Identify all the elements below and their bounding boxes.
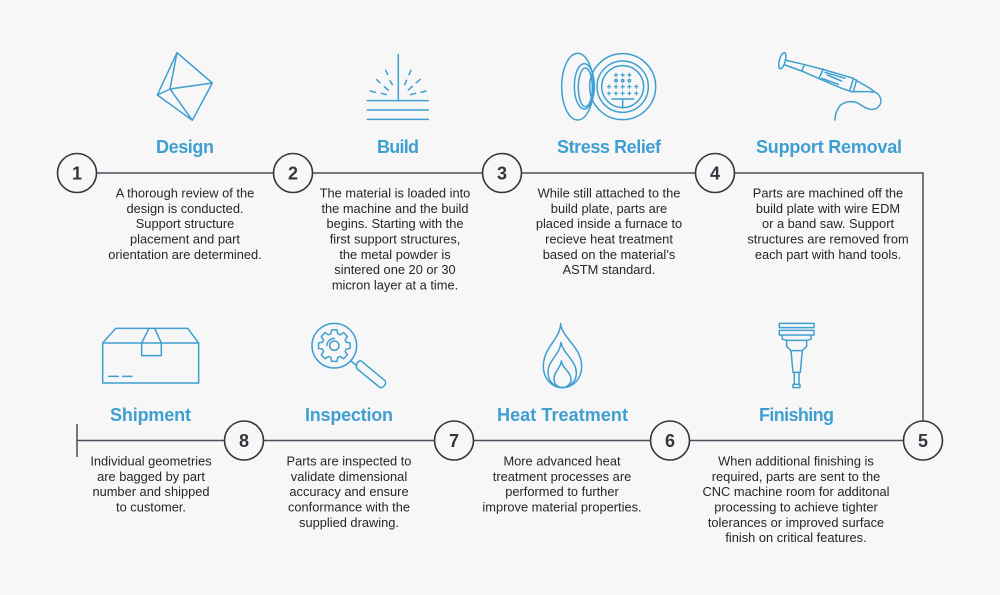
text: finishing description: finish on critical features. (725, 530, 867, 545)
number badge 7: 7 (449, 431, 459, 451)
text: stress relief description: While still attached to the (538, 186, 680, 200)
text: stress relief description: recieve heat treatment (545, 232, 673, 246)
text: support removal description: each part with hand tools. (755, 247, 901, 262)
step 6: heat treatment (482, 324, 642, 514)
text: finishing description: tolerances or improved surface (708, 515, 884, 530)
text: build description: The material is loaded into (320, 186, 470, 200)
step 4: support removal (747, 52, 909, 262)
text: finishing description: processing to achieve tighter (714, 500, 878, 514)
heading: heat treatment: Heat Treatment (497, 405, 628, 425)
step 1: design (108, 53, 262, 262)
text: finishing description (702, 454, 890, 545)
text: stress relief description (536, 186, 682, 277)
text: shipment description: to customer. (116, 500, 186, 514)
step 8: shipment (90, 328, 212, 514)
icon: flame (543, 324, 582, 388)
number badge 7 (434, 421, 474, 460)
text: design description: orientation are determined. (108, 247, 262, 262)
number badge 8 (224, 421, 264, 460)
text: shipment description (90, 454, 212, 514)
number badge 2: 2 (288, 164, 298, 184)
text: build description: the metal powder is (339, 247, 451, 262)
text: build description: micron layer at a time. (332, 278, 458, 292)
text: shipment description: are bagged by part (97, 469, 205, 484)
text: heat treatment description: improve material properties. (482, 500, 642, 514)
text: build description: the machine and the build (321, 201, 469, 216)
text: support removal description: or a band saw. Support (762, 216, 894, 231)
number badge 3 (482, 154, 522, 192)
text: heat treatment description: performed to further (505, 484, 619, 499)
text: inspection description: accuracy and ensure (289, 484, 409, 499)
text: stress relief description: ASTM standard. (563, 262, 655, 277)
step 3: stress relief (536, 53, 682, 277)
number badge 2 (274, 154, 312, 192)
heading: build: Build (377, 137, 419, 157)
icon: polyhedron (157, 53, 212, 120)
text: shipment description: Individual geometries (90, 454, 212, 468)
number badge 4 (696, 154, 734, 192)
heading: stress relief: Stress Relief (557, 137, 662, 157)
text: finishing description: required, parts are sent to the (712, 469, 880, 484)
text: heat treatment description: treatment processes are (493, 469, 631, 484)
heading: finishing: Finishing (759, 405, 834, 425)
text: inspection description: Parts are inspected to (287, 454, 411, 468)
text: heat treatment description (482, 454, 642, 514)
icon: cnc tool holder (779, 323, 814, 388)
text: build description: first support structures, (330, 232, 460, 246)
text: finishing description: When additional finishing is (718, 454, 874, 468)
text: stress relief description: build plate, parts are (551, 201, 667, 216)
text: inspection description: supplied drawing. (299, 515, 399, 530)
text: design description: design is conducted. (126, 201, 244, 216)
heading: support removal: Support Removal (756, 137, 902, 157)
text: stress relief description: based on the material’s (543, 247, 675, 262)
timeline connector (77, 173, 923, 457)
icon: magnifier with gear (312, 323, 386, 388)
text: support removal description: Parts are machined off the (753, 186, 903, 200)
text: design description (108, 186, 262, 262)
number badge 3: 3 (497, 164, 507, 184)
text: design description: A thorough review of the (116, 186, 254, 200)
text: design description: Support structure (136, 216, 234, 231)
number badge 4: 4 (710, 164, 720, 184)
number badge 1 (58, 154, 96, 192)
text: support removal description: structures are removed from (747, 232, 909, 246)
number badge 1: 1 (72, 164, 82, 184)
text: inspection description: validate dimensional (291, 469, 407, 484)
number badge 5 (904, 421, 942, 460)
number badge 6 (650, 421, 690, 460)
heading: inspection: Inspection (305, 405, 393, 425)
text: inspection description (287, 454, 411, 530)
step 2: build (320, 54, 470, 292)
text: inspection description: conformance with the (288, 500, 410, 514)
text: design description: placement and part (130, 232, 240, 246)
step 5: finishing (702, 323, 890, 545)
text: support removal description (747, 186, 909, 262)
icon: furnace (562, 53, 656, 120)
text: build description (320, 186, 470, 292)
text: support removal description: build plate with wire EDM (756, 201, 900, 216)
step 7: inspection (287, 323, 411, 530)
number badge 6: 6 (665, 431, 675, 451)
number badge 5: 5 (918, 431, 928, 451)
text: stress relief description: placed inside a furnace to (536, 216, 682, 231)
text: finishing description: CNC machine room for additonal (702, 484, 890, 499)
heading: shipment: Shipment (110, 405, 191, 425)
icon: hand tool (777, 52, 881, 120)
number badge 8: 8 (239, 431, 249, 451)
text: build description: begins. Starting with the (326, 216, 464, 231)
text: build description: sintered one 20 or 30 (334, 262, 456, 277)
text: shipment description: number and shipped (92, 484, 210, 499)
icon: laser sintering (367, 54, 428, 119)
text: heat treatment description: More advanced heat (503, 454, 621, 468)
icon: cardboard box (103, 328, 199, 383)
heading: design: Design (156, 137, 214, 157)
